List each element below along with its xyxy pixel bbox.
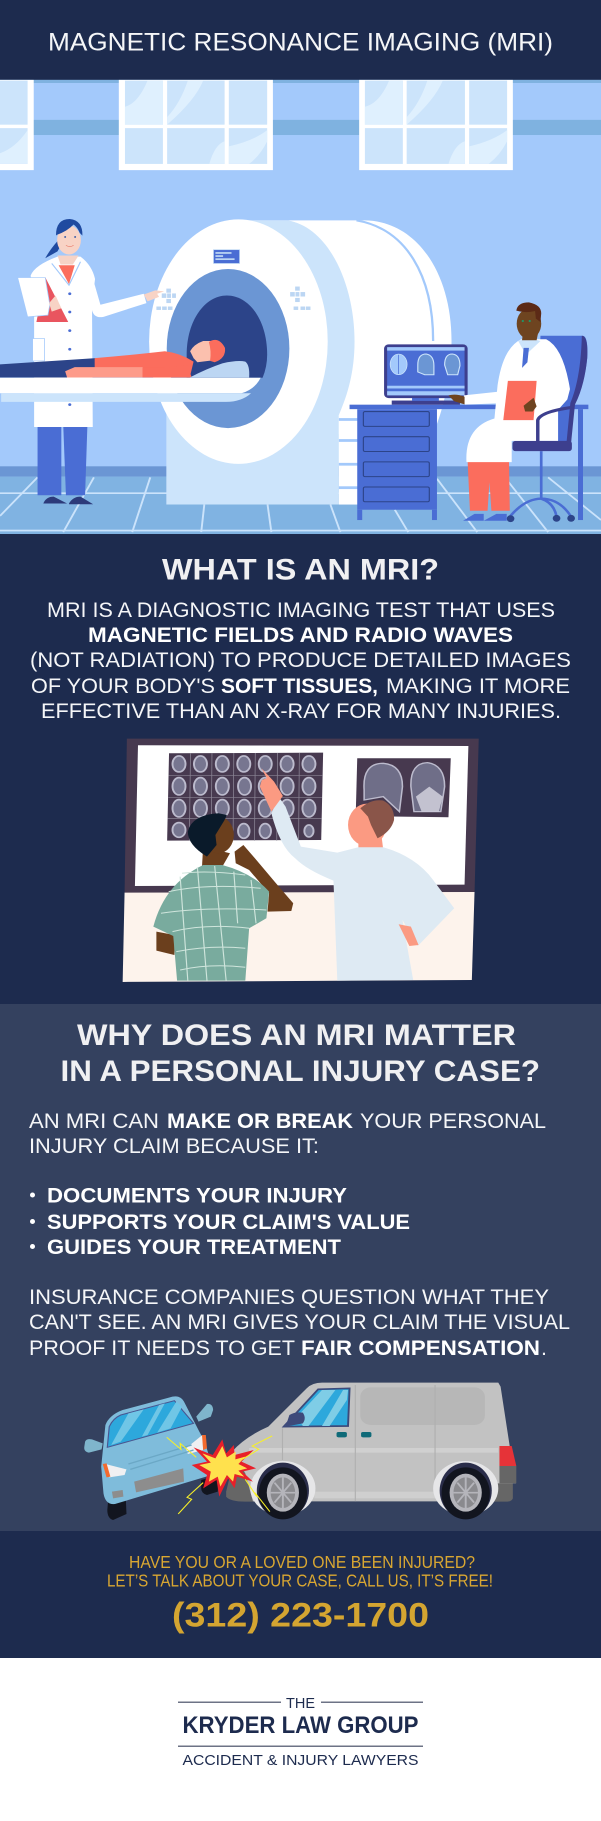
- bullet list: [30, 1184, 410, 1259]
- heading: IN A PERSONAL INJURY CASE?: [60, 1055, 540, 1088]
- text block: invitation: [107, 1552, 493, 1590]
- lightning sparks: [167, 1436, 272, 1514]
- panel: what is an MRI: [0, 534, 601, 1004]
- bullet list: SUPPORTS YOUR CLAIM'S VALUE: [47, 1210, 410, 1234]
- text block: definition: MAGNETIC FIELDS AND RADIO WAVES: [88, 623, 513, 647]
- text block: intro: INJURY CLAIM BECAUSE IT:: [29, 1134, 319, 1158]
- logo: The Kryder Law Group: [178, 1696, 423, 1769]
- phone number: (312) 223-1700: [172, 1596, 429, 1634]
- blue car: [84, 1396, 218, 1520]
- bullet list: GUIDES YOUR TREATMENT: [47, 1235, 341, 1259]
- doctor: man seated in chair: [448, 302, 587, 522]
- text block: insurance: PROOF IT NEEDS TO GET: [29, 1336, 295, 1360]
- collision burst: [192, 1439, 256, 1497]
- logo: The Kryder Law Group: KRYDER LAW GROUP: [182, 1712, 418, 1739]
- text block: intro: [29, 1109, 546, 1158]
- text block: intro: AN MRI CAN: [29, 1109, 159, 1133]
- text block: insurance: INSURANCE COMPANIES QUESTION WHAT THEY: [29, 1285, 549, 1309]
- desk with drawers: [350, 405, 588, 520]
- illustration: MRI room with doctors and patient: [0, 80, 601, 535]
- floor: [0, 466, 601, 535]
- scan sheet: axial slices: [167, 753, 323, 841]
- windows: [0, 80, 513, 170]
- text block: invitation: HAVE YOU OR A LOVED ONE BEEN INJURED?: [129, 1552, 475, 1572]
- patient lying on table: [0, 340, 249, 377]
- text block: definition: MRI IS A DIAGNOSTIC IMAGING TEST THAT USES: [47, 598, 555, 622]
- illustration: car crash: [84, 1383, 516, 1520]
- monitor showing brain scans: [384, 344, 468, 405]
- text block: definition: (NOT RADIATION) TO PRODUCE DETAILED IMAGES: [30, 648, 571, 672]
- illustration: doctor and patient reviewing scans: [123, 739, 479, 982]
- scan sheet: head sagittal views: [356, 758, 451, 817]
- text block: definition: OF YOUR BODY'S: [31, 674, 215, 698]
- text block: definition: EFFECTIVE THAN AN X-RAY FOR MANY INJURIES.: [41, 699, 561, 723]
- van: [226, 1383, 516, 1519]
- panel: why an MRI matters: [0, 1004, 601, 1532]
- heading: [60, 1019, 540, 1088]
- panel: title banner: [0, 0, 601, 80]
- title: MAGNETIC RESONANCE IMAGING (MRI): [48, 28, 553, 56]
- bullet list: DOCUMENTS YOUR INJURY: [47, 1184, 347, 1208]
- patient table: [0, 378, 261, 402]
- text block: invitation: LET’S TALK ABOUT YOUR CASE, CALL US, IT’S FREE!: [107, 1570, 493, 1590]
- text block: intro: MAKE OR BREAK: [167, 1109, 353, 1133]
- text block: insurance: .: [541, 1336, 547, 1360]
- panel: call to action: [0, 1531, 601, 1658]
- figure: doctor pointing: [260, 768, 454, 981]
- text block: insurance: CAN'T SEE. AN MRI GIVES YOUR CLAIM THE VISUAL: [29, 1310, 570, 1334]
- logo: The Kryder Law Group: ACCIDENT & INJURY LAWYERS: [182, 1753, 418, 1769]
- text block: intro: YOUR PERSONAL: [360, 1109, 546, 1133]
- heading: WHY DOES AN MRI MATTER: [77, 1019, 516, 1052]
- text block: insurance: FAIR COMPENSATION: [301, 1336, 540, 1360]
- heading: WHAT IS AN MRI?: [162, 554, 439, 586]
- text block: definition: MAKING IT MORE: [386, 674, 570, 698]
- MRI machine: [149, 219, 452, 505]
- text block: definition: SOFT TISSUES,: [221, 674, 378, 698]
- text block: insurance: [29, 1285, 570, 1360]
- text block: definition: [30, 598, 571, 723]
- logo: The Kryder Law Group: THE: [286, 1696, 315, 1712]
- doctor: woman with clipboard: [18, 219, 164, 504]
- figure: patient looking at scans: [153, 813, 293, 981]
